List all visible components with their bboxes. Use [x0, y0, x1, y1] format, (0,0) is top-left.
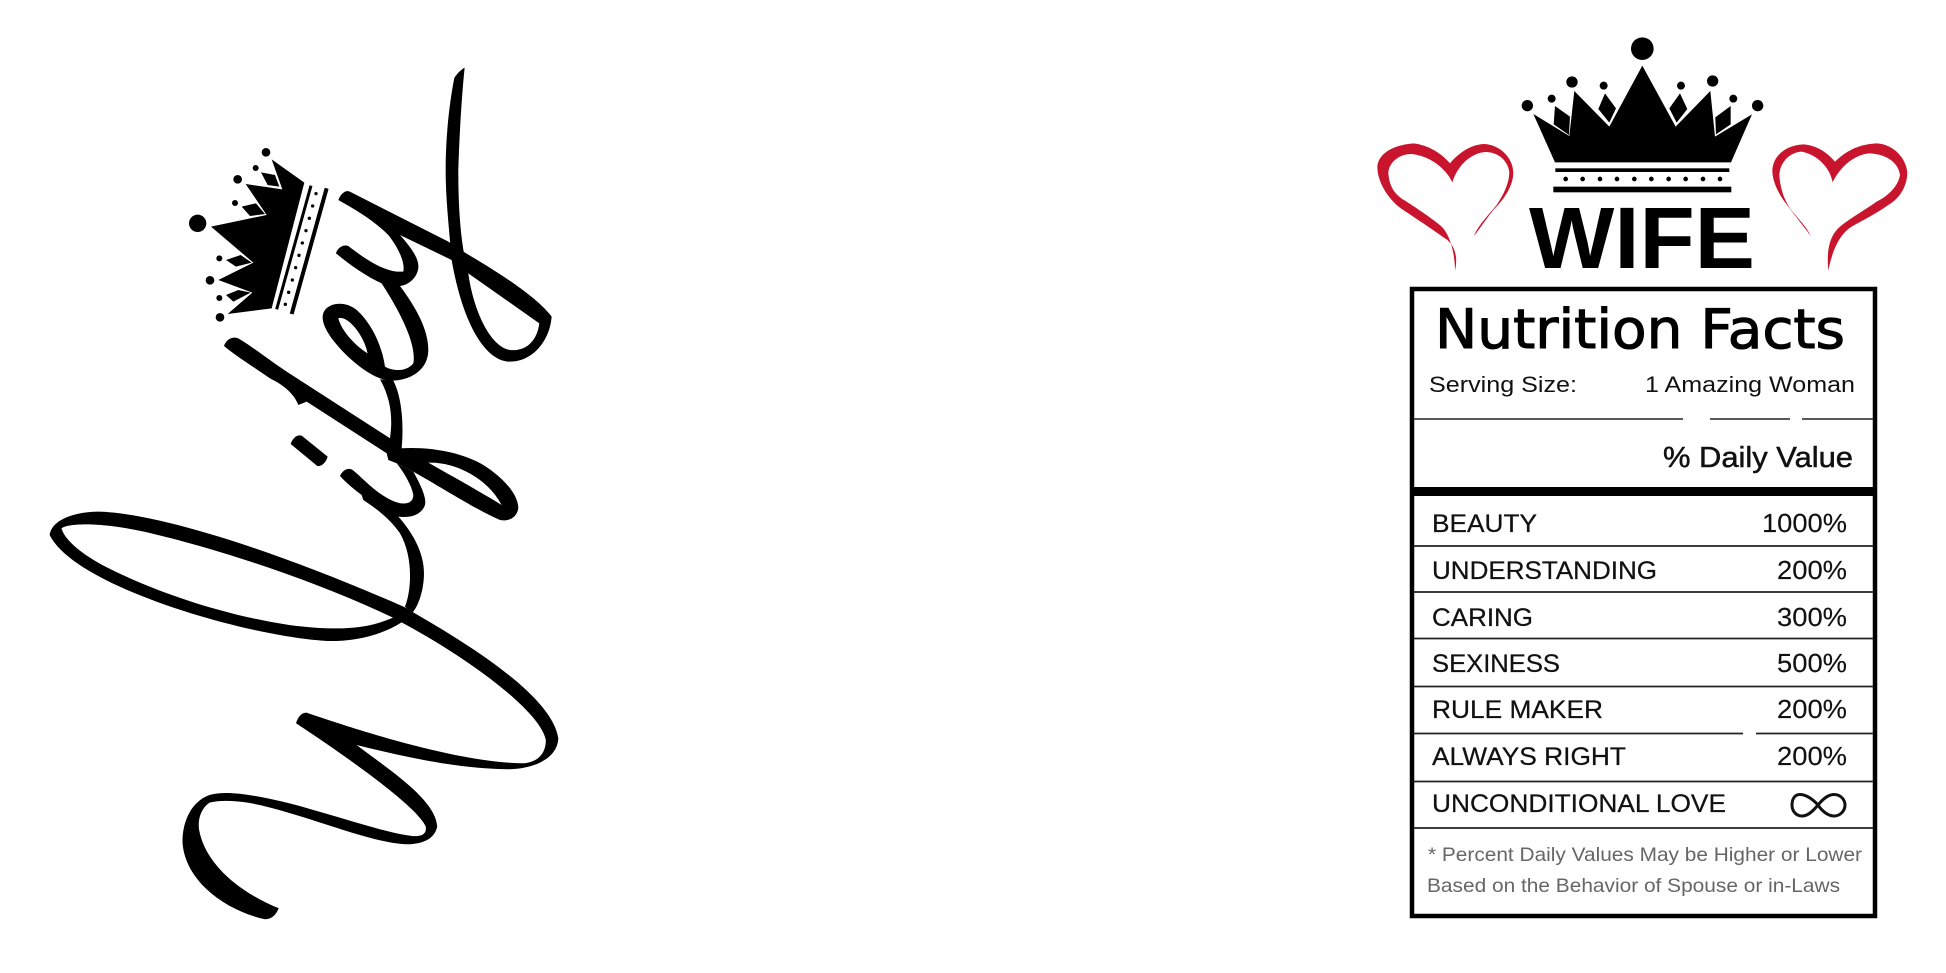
footnote: * Percent Daily Values May be Higher or Lower	[1428, 844, 1863, 866]
row: always right	[1432, 741, 1847, 771]
icon: left red heart	[1377, 143, 1513, 271]
serving size label: Serving Size:	[1429, 372, 1577, 397]
serving size value: 1 Amazing Woman	[1645, 372, 1855, 397]
heading: WIFE: WIFE	[1529, 190, 1755, 287]
letter y ascending stem	[446, 68, 465, 261]
row: always right: 200%	[1777, 741, 1847, 771]
column heading: % Daily Value: % Daily Value	[1663, 442, 1853, 474]
row: rule maker: RULE MAKER	[1432, 696, 1603, 724]
letters e and y with crossbar and loop	[323, 191, 552, 381]
icon: rotated crown over script	[189, 148, 327, 322]
row: caring: CARING	[1432, 604, 1533, 632]
row: beauty	[1432, 508, 1847, 538]
row: always right: ALWAYS RIGHT	[1432, 743, 1626, 771]
label border	[1412, 289, 1875, 916]
row: beauty: BEAUTY	[1432, 510, 1537, 538]
row: sexiness: SEXINESS	[1432, 650, 1560, 678]
row: caring	[1432, 602, 1847, 632]
letter i dot	[291, 435, 328, 466]
script lettering: Wifey	[50, 68, 558, 919]
letter W with long oval swash	[50, 512, 558, 919]
icon: infinity symbol	[1792, 794, 1845, 816]
row: unconditional love: UNCONDITIONAL LOVE	[1432, 790, 1726, 818]
footnote: Based on the Behavior of Spouse or in-Laws	[1427, 875, 1840, 897]
letters i, f, e, y	[224, 68, 552, 613]
row: rule maker	[1432, 694, 1847, 724]
row: understanding: UNDERSTANDING	[1432, 557, 1657, 585]
footnote	[1427, 844, 1863, 897]
letter i stem	[340, 463, 425, 613]
row: beauty: 1000%	[1762, 508, 1847, 538]
row dividers	[1414, 546, 1873, 828]
thick divider bar	[1412, 487, 1875, 496]
row: sexiness: 500%	[1777, 648, 1847, 678]
row: unconditional love	[1432, 790, 1845, 818]
letter f	[224, 338, 518, 520]
row: sexiness	[1432, 648, 1847, 678]
icon: right red heart	[1772, 143, 1907, 271]
title: Nutrition Facts: Nutrition Facts	[1435, 298, 1845, 361]
divider under serving size	[1414, 418, 1873, 420]
row: understanding	[1432, 555, 1847, 585]
row: caring: 300%	[1777, 602, 1847, 632]
icon: upright crown	[1522, 37, 1763, 192]
panel: nutrition facts label	[1412, 289, 1875, 916]
row: understanding: 200%	[1777, 555, 1847, 585]
row: rule maker: 200%	[1777, 694, 1847, 724]
